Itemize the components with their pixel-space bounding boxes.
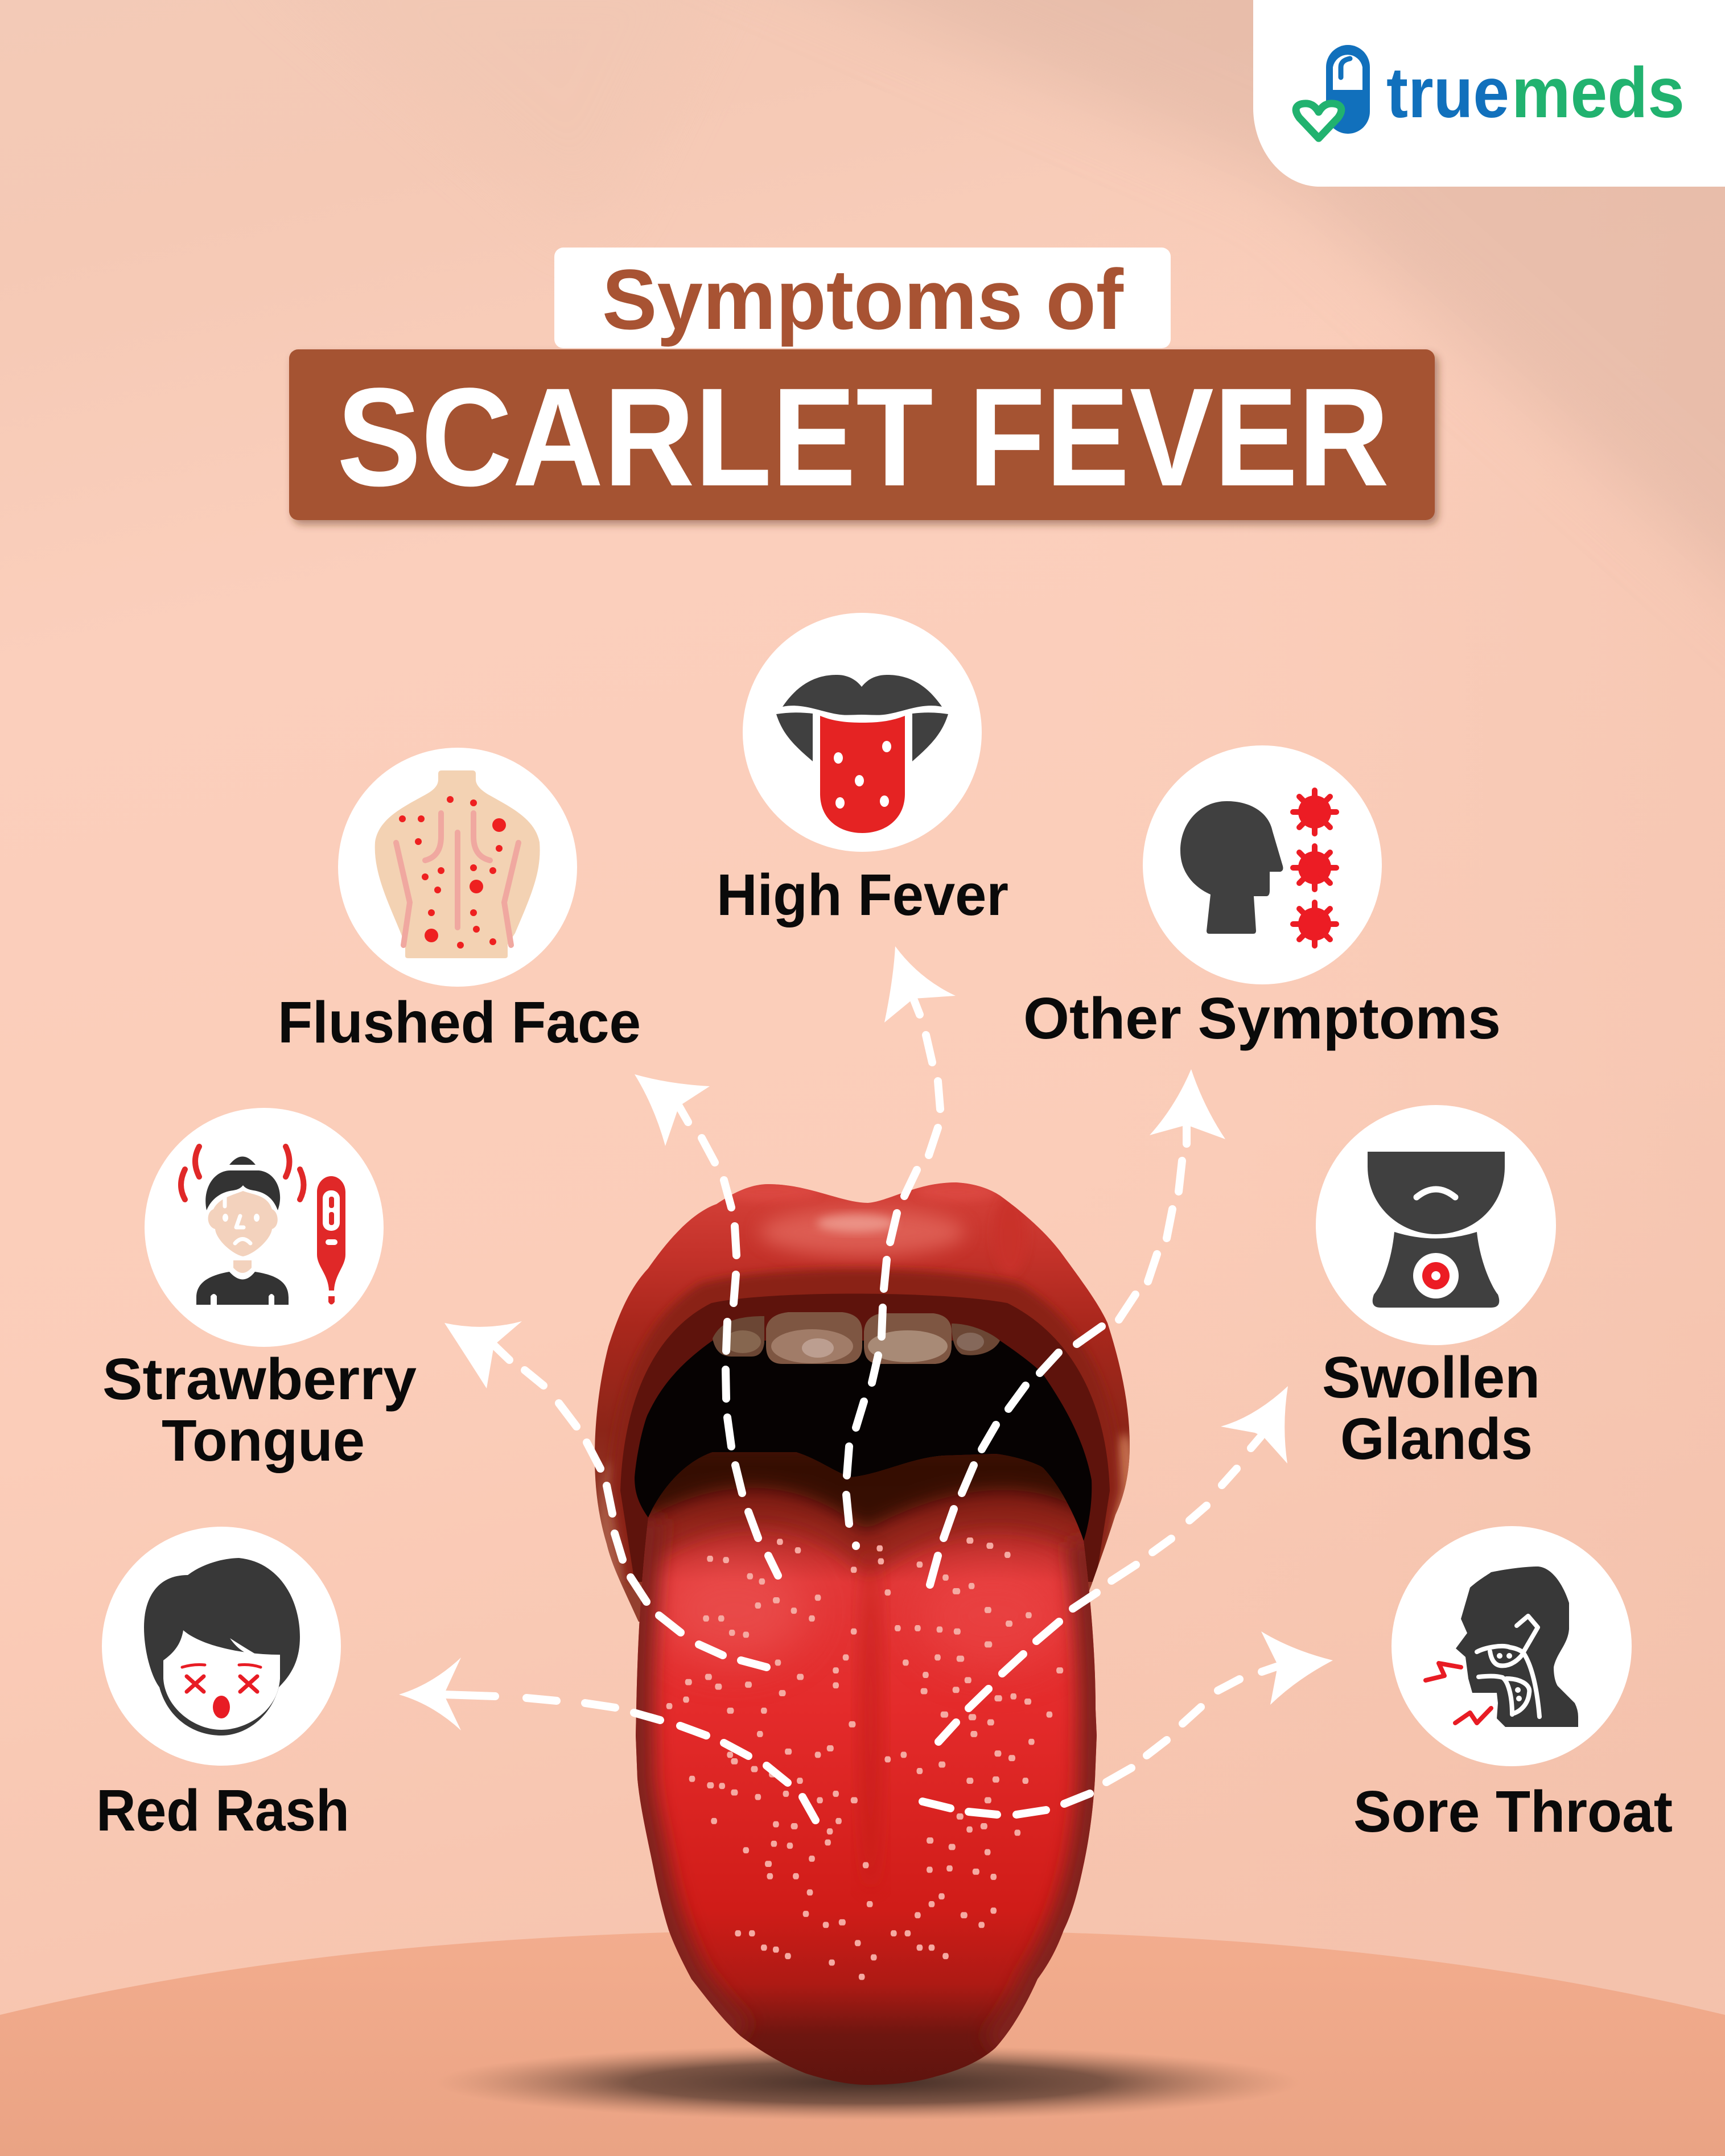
logo word: true: true [1386,53,1509,133]
label: Flushed Face [278,990,641,1055]
arrow: to Strawberry Tongue [444,1321,767,1667]
arrow: to Swollen Glands [938,1386,1288,1742]
tongue shadow [435,2045,1300,2120]
mouth opening [635,1341,1092,1541]
arrow: to High Fever [846,946,956,1546]
title: Symptoms of: Symptoms of [602,252,1124,347]
icon: neck with swollen gland [1368,1152,1505,1308]
label: Other Symptoms [1023,986,1501,1051]
label: Sore Throat [1353,1779,1673,1844]
symptom: Other Symptoms [1023,745,1501,1051]
tongue [626,1445,1110,2094]
papillae [668,1540,1061,1977]
arrow: to Other Symptoms [930,1069,1225,1585]
symptom: Swollen Glands: Glands [1340,1406,1533,1471]
symptom: Flushed Face [278,748,641,1055]
teeth [713,1312,1000,1364]
logo word: meds: meds [1512,53,1685,133]
icon: head with viruses [1180,790,1336,946]
icon: throat cross-section [1426,1566,1578,1727]
symptom: Strawberry Tongue [102,1108,417,1473]
symptom: Red Rash [96,1527,349,1843]
illustration: mouth and tongue [586,1172,1138,2094]
icon: feverish person with thermometer [181,1147,345,1305]
icon: pill [1326,45,1370,134]
logo card [1253,0,1725,187]
arrow: to Red Rash [399,1658,816,1820]
lips [586,1172,1138,1627]
label: Red Rash [96,1778,349,1843]
title: Scarlet Fever banner: SCARLET FEVER [337,359,1389,516]
symptom: Swollen Glands [1316,1105,1556,1471]
icon: tongue out [776,675,948,833]
symptom: Strawberry Tongue: Tongue [162,1408,365,1473]
ground hill [0,1930,1725,2156]
symptom: High Fever [717,613,1008,927]
symptom: Sore Throat [1353,1526,1673,1844]
arrow: to Sore Throat [923,1631,1333,1815]
arrow: to Flushed Face [635,1074,778,1576]
label: Strawberry [102,1346,417,1412]
icon: face with crossed eyes [144,1558,300,1735]
icon: heart [1296,104,1341,138]
label: Swollen [1322,1345,1540,1410]
label: High Fever [717,862,1008,927]
icon: back with rash [375,770,540,958]
